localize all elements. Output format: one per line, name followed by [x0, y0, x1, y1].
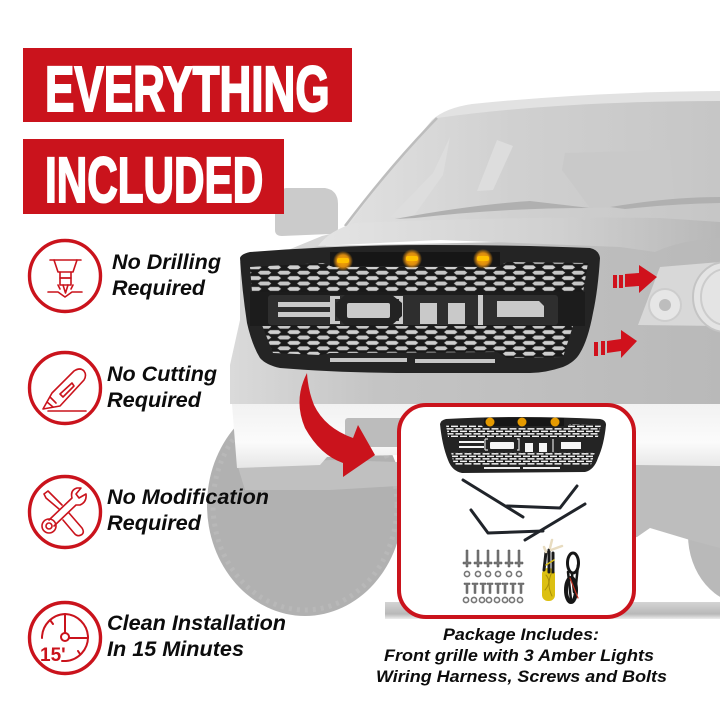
ground shadow — [385, 602, 720, 619]
left front tyre — [207, 394, 403, 616]
text: package includes: Package Includes: — [443, 625, 599, 644]
grille frame — [240, 245, 600, 373]
a-pillar edge — [345, 118, 437, 226]
text: no cutting required: Required — [107, 388, 202, 412]
text: package includes — [376, 625, 667, 686]
text: no modification required: No Modification — [107, 485, 269, 509]
text: clean installation: Clean Installation — [107, 611, 286, 635]
arrow: curved to package — [299, 373, 375, 477]
text: package includes: Wiring Harness, Screws and Bolts — [376, 667, 667, 686]
mirror arm — [288, 232, 338, 250]
icon: 15 minute clock: 15' — [40, 645, 66, 666]
headlight housing — [638, 262, 720, 332]
wipers — [395, 201, 590, 219]
right front tyre — [688, 465, 720, 605]
licence plate recess — [345, 418, 405, 447]
lower centre slots — [330, 358, 407, 362]
text: no drilling required: No Drilling — [112, 250, 221, 274]
icon: utility knife — [30, 352, 100, 424]
lettering — [278, 295, 544, 325]
upper mesh — [250, 262, 588, 292]
main grille product — [240, 245, 600, 373]
mini grille — [440, 417, 606, 473]
panel: package contents — [399, 405, 634, 617]
arrow: upper red pointer — [613, 265, 657, 293]
text: no drilling required — [112, 250, 221, 300]
body front — [230, 235, 720, 404]
windshield reflections — [390, 137, 513, 217]
text: package includes: Front grille with 3 Amber Lights — [384, 646, 654, 665]
lower mesh — [262, 325, 573, 358]
centre plate — [250, 292, 585, 326]
arrow: lower red pointer — [594, 330, 637, 358]
windshield — [347, 101, 720, 228]
heading: EVERYTHING: EVERYTHING — [45, 53, 330, 125]
interior seats — [562, 150, 675, 208]
yellow wiring harness — [542, 540, 562, 601]
bumper — [232, 404, 720, 468]
text: no cutting required: No Cutting — [107, 362, 217, 386]
hood — [318, 218, 720, 252]
text: no modification required: Required — [107, 511, 202, 535]
text: clean installation: In 15 Minutes — [107, 637, 244, 661]
bolts and washers — [463, 550, 524, 594]
text: no drilling required: Required — [112, 276, 206, 300]
heading: INCLUDED: INCLUDED — [45, 145, 263, 216]
side mirror — [275, 188, 338, 236]
valance left highlight — [238, 460, 397, 490]
text: no modification required — [107, 485, 269, 535]
lower valance — [397, 455, 720, 560]
icon: wrench and screwdriver — [30, 476, 100, 548]
icon: 15 minute clock — [30, 602, 100, 674]
text: no cutting required — [107, 362, 217, 412]
icon: drilling machine — [30, 240, 100, 312]
text: clean installation — [107, 611, 286, 661]
black wiring harness — [566, 553, 578, 602]
amber lights — [330, 249, 500, 271]
cab roof — [340, 91, 720, 232]
truck background photo — [207, 91, 720, 619]
brackets — [463, 480, 585, 540]
